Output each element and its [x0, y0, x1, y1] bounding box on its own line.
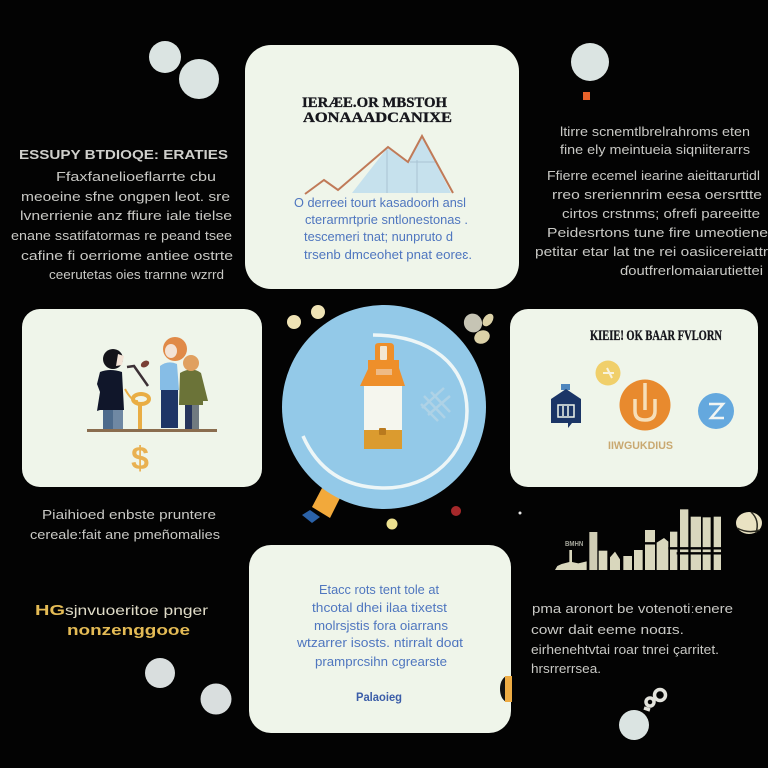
highlight text: gold callout: sjnvuoeritoe pnger — [65, 602, 208, 618]
text block: upper right: ltirre scnemtlbrelrahroms eten — [560, 124, 750, 139]
body text: bottom card: molrsjstis fora oiarrans — [314, 618, 449, 633]
highlight text: gold callout: nonzenɡɡooe — [67, 622, 190, 639]
line and area chart — [305, 136, 453, 194]
body text: chart card: cterarmrtprie sntlonestonas . — [305, 212, 468, 227]
text block: upper right: petitar etar lat tne rei oasiicereiattr — [535, 244, 768, 259]
text block: lower right: hrsrrerrsea. — [531, 661, 601, 676]
body text: chart card: tescemeri tnat; nunpruto d — [304, 229, 453, 244]
tab: bottom card edge — [500, 676, 512, 702]
panel: bottom text card — [249, 545, 512, 733]
body text: chart card: O derreei tourt kasadoorh ansl — [294, 195, 466, 210]
text block: upper right: Ffierre ecemel iearine aieittarurtidl — [547, 168, 760, 183]
text block: upper right: fine ely meintueia siqniiterarrs — [560, 142, 751, 157]
body text: bottom card: Etacc rots tent tole at — [319, 582, 439, 597]
icon: bottle — [360, 343, 405, 449]
text block: lower right: eirhenehtvtai roar tnrei çarritet. — [531, 642, 719, 657]
magnifier lens — [282, 305, 486, 509]
illustration: man in dark coat — [97, 349, 124, 429]
panel: top chart card — [245, 45, 519, 289]
illustration: pointer and leaf — [127, 359, 150, 386]
body text: upper left: cafine fi oerriome antiee ostrte — [21, 248, 233, 263]
body text: bottom card — [296, 582, 463, 669]
text block: people caption: Piaihioed enbste pruntere — [42, 507, 216, 522]
icon: chain links — [644, 690, 666, 710]
text block: people caption — [30, 507, 221, 542]
body text: upper left: enane ssatifatormas re peand tsee — [11, 228, 232, 243]
decorative circle and marker: top right — [571, 43, 609, 100]
icon: faint hatch mark — [421, 388, 450, 421]
text block: upper right: ɗoutfrerlomaiarutiettei — [620, 263, 763, 278]
text block: lower right: cowr dait eeme noɑɪs. — [531, 622, 684, 637]
icon: yellow badge — [596, 360, 620, 386]
body text: upper left: lvnerrienie anz ffiure iale tielse — [20, 208, 232, 223]
illustration: ground line — [87, 429, 217, 432]
central magnifier illustration — [282, 305, 486, 523]
icon label: IIWGUKDIUS — [608, 440, 673, 452]
text block: lower right — [531, 601, 733, 676]
label: bottom card: Palaoieg — [356, 690, 402, 704]
illustration: gold stand — [125, 389, 149, 429]
body text: bottom card: wtzarrer isosts. ntirralt doɑt — [296, 635, 463, 650]
icon: blue circle — [698, 393, 734, 429]
highlight text: gold callout: HG — [35, 602, 65, 619]
body text: upper left: Ffaxfanelioeflarrte cbu — [56, 169, 216, 184]
panel: icons card — [510, 309, 758, 487]
icon: cream cap — [736, 512, 762, 534]
heading: chart card: IERÆE.OR MBSTOH — [302, 95, 447, 111]
lens highlight arc — [303, 335, 467, 488]
text block: upper right: Peidesrtons tune fire umeotiene — [547, 225, 768, 240]
panel: people card — [22, 309, 262, 487]
icon: magnifier handle — [302, 488, 340, 523]
decorative circle: bottom right — [619, 710, 649, 740]
body text: upper left — [11, 169, 233, 282]
heading: chart card: AONAAADCANIXE — [303, 110, 452, 126]
icon: dollar sign: $ — [131, 440, 149, 476]
icon: navy house — [551, 384, 581, 428]
bar chart: skyline: BMHN — [565, 539, 583, 548]
body text: upper left: meoeine sfne ongpen leot. sre — [21, 189, 230, 204]
illustration: woman in blue — [160, 337, 187, 428]
bar chart: skyline — [555, 509, 721, 570]
body text: chart card: trsenb dmceohet pnat eoreɛ. — [304, 247, 472, 262]
text block: upper left — [11, 147, 233, 282]
body text: bottom card: thcotal dhei ilaa tixetst — [312, 600, 447, 615]
illustration: person in olive jacket — [179, 355, 208, 429]
decorative circles: top left — [149, 41, 219, 99]
text block: people caption: cereale:fait ane pmeñomalies — [30, 527, 221, 542]
highlight text: gold callout — [35, 602, 208, 639]
text block: upper right: cirtos crstnms; ofrefi pareeitte — [562, 206, 760, 221]
body text: chart card — [294, 195, 472, 262]
body text: upper left: ceerutetas oies trarnne wzrrd — [49, 267, 224, 282]
text block: upper right: rreo sreriennrim eesa oersrttte — [552, 187, 762, 202]
decorative circles: bottom left — [145, 658, 232, 714]
icon: orange circle — [620, 380, 670, 430]
heading: chart card — [302, 95, 452, 126]
body text: bottom card: pramprcsihn cgrearste — [315, 654, 447, 669]
text block: upper right — [535, 124, 768, 278]
decorative coins and dots around lens — [287, 305, 522, 530]
heading: upper left: ESSUPY BTDIOQE: ERATIES — [19, 147, 228, 162]
text block: lower right: pma aronort be votenotiːenere — [532, 601, 733, 616]
